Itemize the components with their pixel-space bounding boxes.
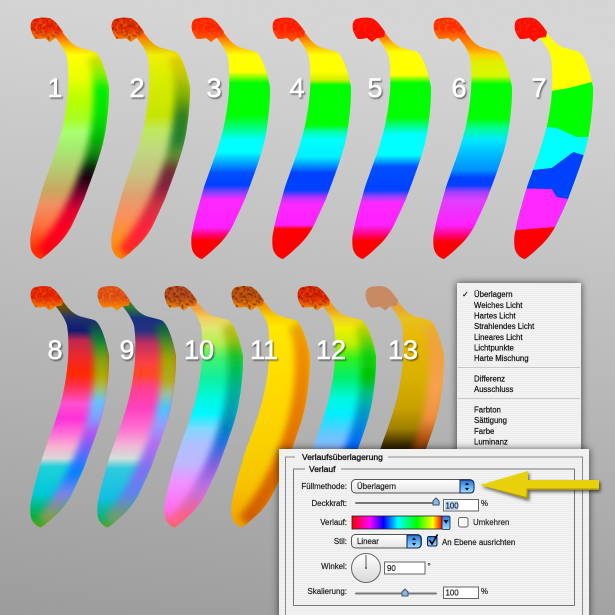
blend mode menu: Harte Mischung [474,354,529,363]
numbers: 5 [367,73,383,103]
opacity slider: % [481,499,488,508]
numbers: 4 [289,73,305,103]
numbers: 9 [119,335,135,365]
angle dial [352,554,431,582]
banana 11 [231,286,310,528]
numbers: 3 [206,73,222,103]
align checkbox: An Ebene ausrichten [442,538,515,547]
angle dial: 90 [387,564,396,573]
section heading: Verlauf [309,464,336,474]
gradient swatch [352,516,450,530]
numbers: 7 [531,73,547,103]
blend mode menu: Lichtpunkte [474,344,514,352]
blend mode menu: ✓ [462,290,469,299]
numbers [47,73,547,365]
scale slider: % [481,587,488,596]
banana 4 [272,18,352,259]
banana 9 [97,286,176,528]
numbers: 1 [47,73,63,103]
blend mode menu: Weiches Licht [474,301,523,310]
field labels: Deckkraft: [311,499,347,508]
blend mode menu: Hartes Licht [474,312,516,320]
numbers: 2 [129,73,145,103]
scale slider [355,587,488,598]
opacity slider [355,498,488,511]
field labels: Stil: [334,537,347,546]
field labels: Winkel: [321,562,347,571]
field labels [301,482,347,596]
numbers: 6 [451,73,467,103]
blend mode menu: Überlagern [474,290,513,299]
align checkbox [428,534,515,547]
style select: Linear [357,537,379,546]
blend mode select [352,480,474,493]
blend mode menu: Lineares Licht [474,333,523,342]
reverse checkbox [458,518,509,527]
field labels: Skalierung: [308,587,347,596]
numbers: 13 [388,335,418,365]
banana 5 [352,18,432,259]
numbers: 10 [184,335,214,365]
blend mode menu: Farbton [474,406,501,414]
blend mode menu: Farbe [474,427,494,436]
banana 10 [164,286,244,528]
blend mode menu: Luminanz [474,438,508,446]
layer style dialog [279,449,589,615]
banana 12 [298,286,376,449]
style select [352,534,422,548]
banana 13 [366,286,444,449]
scale slider: 100 [446,588,459,598]
outer fieldset [286,457,582,615]
blend mode menu: Sättigung [474,416,507,425]
banana 1 [30,18,110,259]
reverse checkbox: Umkehren [473,518,509,527]
numbers: 11 [250,335,278,365]
field labels: Füllmethode: [301,482,347,491]
blend mode menu: Differenz [474,374,505,384]
blend mode menu: Ausschluss [474,385,514,394]
numbers: 8 [47,335,63,365]
arrow [480,471,599,499]
blend mode menu: Strahlendes Licht [474,322,535,331]
angle dial: ° [428,562,431,571]
banana 8 [30,286,110,528]
numbers: 12 [316,335,346,365]
inner fieldset [294,469,574,606]
dialog heading: Verlaufsüberlagerung [302,452,383,462]
banana 7 [514,18,594,259]
blend mode select: Überlagern [357,482,396,491]
banana 6 [433,18,512,259]
banana 2 [111,18,190,259]
blend mode menu [457,283,581,458]
field labels: Verlauf: [320,518,347,527]
banana 3 [191,18,270,259]
opacity slider: 100 [446,502,459,510]
